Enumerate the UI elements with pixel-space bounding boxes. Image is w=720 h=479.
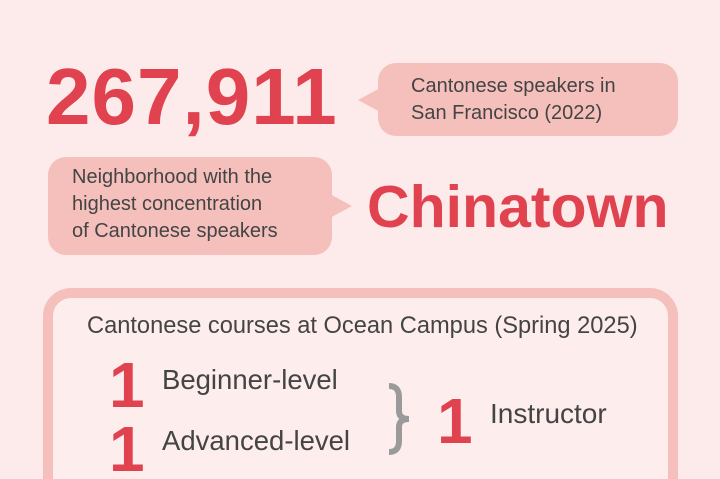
callout: neighborhood: highest concentration xyxy=(72,193,262,215)
panel heading: Cantonese courses at Ocean Campus (Spring 2025) xyxy=(87,312,638,339)
panel: courses xyxy=(43,288,678,479)
callout: Cantonese speakers: San Francisco (2022) xyxy=(411,102,602,124)
callout: Cantonese speakers xyxy=(358,63,678,136)
label: advanced: Advanced-level xyxy=(162,425,350,456)
number: instructor: 1 xyxy=(437,385,473,457)
callout: neighborhood: Neighborhood with the xyxy=(72,166,272,188)
callout: neighborhood xyxy=(48,157,352,255)
stat: Chinatown: Chinatown xyxy=(367,174,669,240)
label: instructor: Instructor xyxy=(490,398,607,429)
label: beginner: Beginner-level xyxy=(162,364,338,395)
stat: 267,911: 267,911 xyxy=(46,52,338,141)
number: beginner: 1 xyxy=(109,349,145,421)
callout: Cantonese speakers: Cantonese speakers in xyxy=(411,75,616,97)
callout: neighborhood: of Cantonese speakers xyxy=(72,220,278,242)
icon: brace xyxy=(389,383,409,455)
